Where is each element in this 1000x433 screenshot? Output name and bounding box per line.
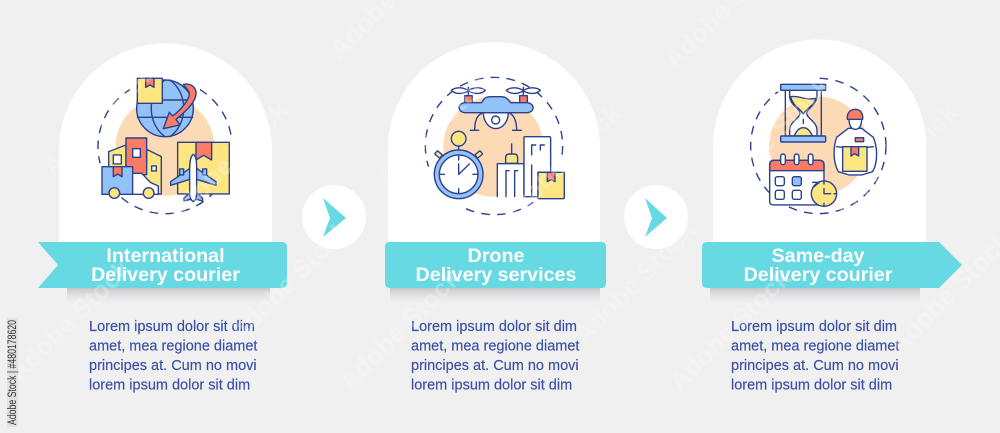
arch card xyxy=(59,44,272,250)
body text: lorem ipsum dolor sit dim xyxy=(731,378,892,394)
ribbon header xyxy=(702,242,962,288)
ribbon shadow xyxy=(390,288,600,306)
body text: amet, mea regione diamet xyxy=(89,338,257,354)
heading: Drone xyxy=(468,245,524,267)
arch card xyxy=(713,40,926,250)
watermark text: Adobe Stock xyxy=(703,70,837,204)
heading: Delivery courier xyxy=(91,264,240,286)
watermark text: Adobe Stock xyxy=(3,253,137,387)
ribbon header xyxy=(385,242,606,288)
heading: Delivery services xyxy=(416,264,577,286)
body text: Lorem ipsum dolor sit dim xyxy=(89,319,255,335)
watermark text: Adobe Stock xyxy=(36,47,170,181)
body text: Lorem ipsum dolor sit dim xyxy=(411,319,577,335)
icon: globe, parcels, truck and plane xyxy=(93,73,238,216)
watermark text: Adobe Stock xyxy=(160,95,294,229)
ribbon shadow xyxy=(710,288,920,306)
panel: drone delivery xyxy=(385,42,606,394)
body text: amet, mea regione diamet xyxy=(411,338,579,354)
heading: Delivery courier xyxy=(744,264,893,286)
watermark text: Adobe Stock xyxy=(830,97,964,231)
heading: Same-day xyxy=(771,245,865,267)
panel: international delivery xyxy=(38,44,287,394)
body text: Lorem ipsum dolor sit dim xyxy=(731,319,897,335)
panel: same-day delivery xyxy=(702,40,962,394)
arrow: step two to three xyxy=(624,185,688,249)
watermark text: Adobe Stock xyxy=(493,97,627,231)
body text: principes at. Cum no movi xyxy=(411,358,579,374)
watermark text: Adobe Stock xyxy=(370,57,504,191)
icon: hourglass, courier, calendar and clock xyxy=(747,70,886,214)
stock id label: Adobe Stock | #480178620 xyxy=(7,320,19,425)
watermark text: Adobe Stock xyxy=(663,262,797,396)
body text: amet, mea regione diamet xyxy=(731,338,899,354)
watermark text: Adobe Stock xyxy=(223,213,357,347)
ribbon shadow xyxy=(67,288,270,306)
body text: principes at. Cum no movi xyxy=(89,358,257,374)
arrow: step one to two xyxy=(302,185,366,249)
icon: drone, stopwatch, city and parcel xyxy=(423,77,567,215)
body text: lorem ipsum dolor sit dim xyxy=(411,378,572,394)
arch card xyxy=(388,42,600,250)
ribbon header xyxy=(38,242,287,288)
watermark text: Adobe Stock xyxy=(333,262,467,396)
heading: International xyxy=(106,245,225,267)
body text: lorem ipsum dolor sit dim xyxy=(89,378,250,394)
watermark text: Adobe Stock xyxy=(568,215,702,349)
body text: principes at. Cum no movi xyxy=(731,358,899,374)
